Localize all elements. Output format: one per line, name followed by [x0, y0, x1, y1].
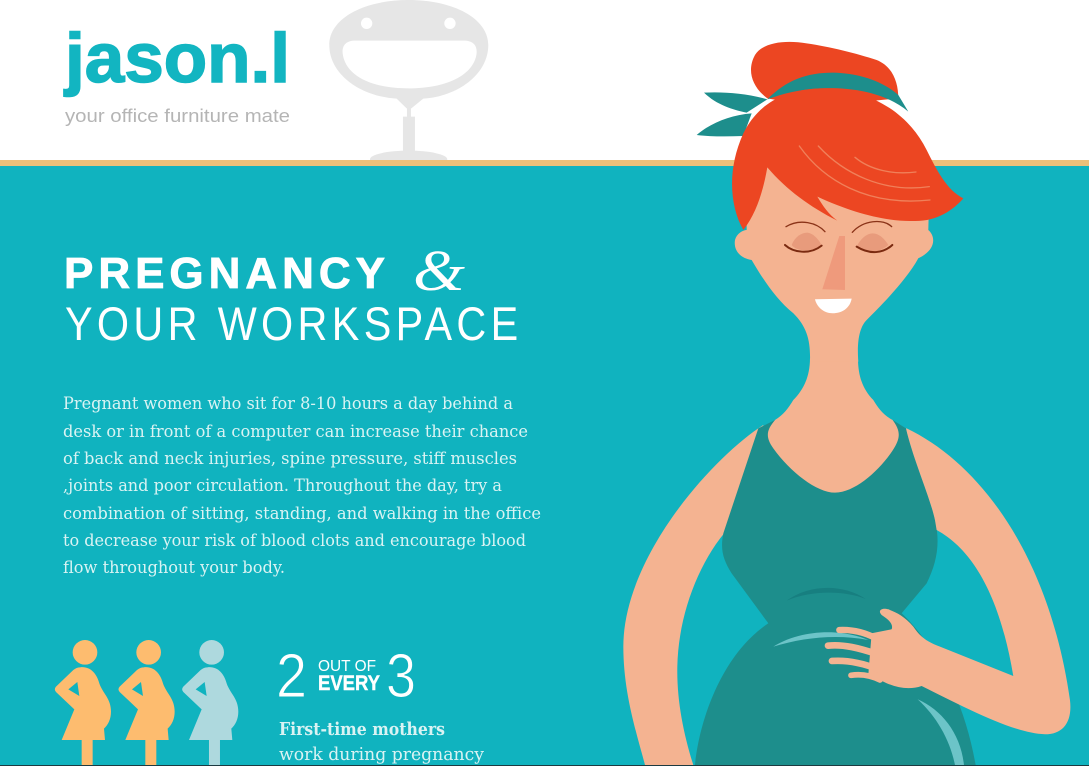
intro paragraph: to decrease your risk of blood clots and encourage blood	[63, 531, 526, 551]
statistic: 2 out of every 3: EVERY	[318, 672, 380, 695]
logo: jason.l: jason.l	[63, 19, 290, 97]
logo: jason.l: your office furniture mate	[65, 105, 290, 126]
illustration: pregnant woman	[623, 42, 1070, 765]
hair bun	[751, 42, 898, 107]
nose	[822, 236, 845, 290]
hair strands	[799, 146, 930, 201]
head and hair	[697, 42, 963, 362]
eyes	[785, 233, 892, 252]
intro paragraph	[63, 394, 541, 578]
intro paragraph: desk or in front of a computer can increase their chance	[63, 422, 528, 442]
background: white header	[0, 0, 1089, 161]
title: YOUR WORKSPACE	[65, 299, 518, 351]
title: PREGNANCY	[64, 249, 385, 298]
teal panel	[0, 166, 1089, 766]
body and arms	[623, 358, 1070, 765]
statistic: 2 out of every 3: OUT OF	[318, 658, 376, 675]
belly side highlight	[918, 699, 964, 765]
statistic caption: work during pregnancy	[279, 744, 485, 765]
statistic: 2 out of every 3: 3	[386, 642, 416, 711]
ribbon tails	[697, 92, 767, 136]
figure 2	[118, 640, 175, 765]
gold divider band	[0, 160, 1089, 166]
figure 1	[55, 640, 111, 765]
intro paragraph: flow throughout your body.	[63, 558, 285, 578]
title: &	[413, 238, 465, 303]
belly highlight	[773, 632, 868, 647]
figure 3	[182, 640, 238, 765]
eyebrows	[786, 221, 892, 232]
title	[64, 238, 518, 351]
right arm and hand	[828, 428, 1070, 734]
smile	[815, 299, 852, 313]
neck and chest	[762, 358, 905, 503]
intro paragraph: of back and neck injuries, spine pressure, stiff muscles	[63, 449, 517, 469]
intro paragraph: combination of sitting, standing, and walking in the office	[63, 504, 541, 524]
statistic caption	[279, 719, 485, 765]
statistic: 2 out of every 3	[276, 642, 416, 711]
headband	[767, 73, 908, 112]
intro paragraph: ,joints and poor circulation. Throughout the day, try a	[63, 476, 502, 496]
face and neck	[735, 163, 933, 362]
intro paragraph: Pregnant women who sit for 8-10 hours a day behind a	[63, 394, 513, 414]
icon: three pregnant figures	[55, 640, 238, 765]
left arm	[623, 425, 763, 765]
icon: grey chair	[329, 0, 488, 168]
statistic: 2 out of every 3: 2	[276, 642, 307, 711]
dress fold	[787, 588, 866, 601]
hair front	[732, 88, 963, 230]
statistic caption: First-time mothers	[279, 719, 445, 740]
bottom edge	[0, 765, 1089, 766]
dress	[695, 420, 976, 765]
